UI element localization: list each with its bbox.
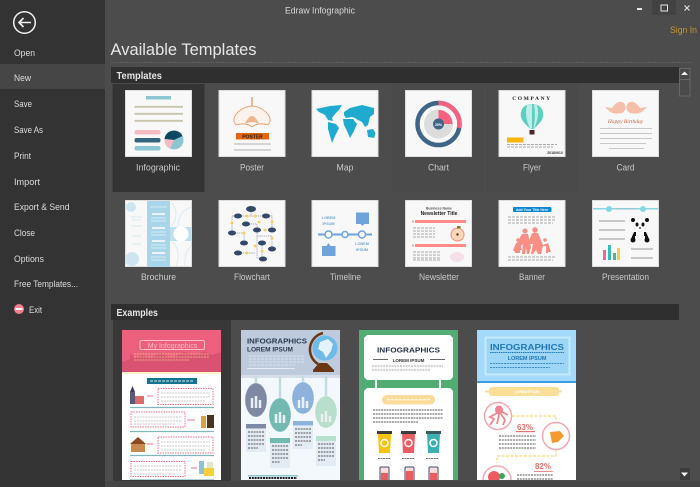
template: newsletter: Business Name <box>426 206 452 210</box>
example cards <box>122 330 576 487</box>
example: infographics lorem ipsum with globe <box>241 330 340 482</box>
menu items: New <box>14 73 31 84</box>
example: infographics blue percentages: INFOGRAPHICS <box>490 343 565 352</box>
bottom status strip <box>105 481 700 487</box>
example: my infographics: My Infographics <box>148 343 198 350</box>
template: timeline: Timeline <box>330 272 361 283</box>
icon: octopus circle <box>484 402 512 430</box>
selected template highlight <box>112 84 204 192</box>
template: poster: POSTER <box>242 134 263 140</box>
section bar: templates <box>111 67 679 83</box>
template: poster <box>219 90 285 174</box>
section bar: templates: Templates <box>116 70 162 82</box>
sign in link: Sign In <box>670 25 697 36</box>
icon: exit <box>14 304 24 314</box>
menu items: Import <box>14 177 40 188</box>
icon: tomato circle <box>482 465 512 480</box>
example: infographics lorem ipsum with globe: INFOGRAPHICS <box>247 336 307 346</box>
example: infographics blue percentages: 82% <box>535 462 551 471</box>
template: newsletter: Newsletter <box>419 272 459 283</box>
template: chart: 25% <box>435 123 443 127</box>
example: infographics green recycling: LOREM IPSUM <box>393 358 425 363</box>
template: chart <box>406 90 472 174</box>
template: flyer: COMPANY <box>512 96 552 102</box>
template: banner: Banner <box>519 272 545 283</box>
template: map: Map <box>336 162 354 174</box>
template: newsletter <box>406 200 472 283</box>
template: timeline: IPSUM <box>356 248 368 252</box>
template: timeline <box>312 200 378 283</box>
template: timeline: LOREM <box>322 216 335 220</box>
example: infographics lorem ipsum with globe: LOREM IPSUM <box>247 346 293 354</box>
example: infographics green recycling: INFOGRAPHICS <box>377 348 440 354</box>
sidebar menu <box>0 0 105 487</box>
template: card: Happy Birthday <box>607 119 644 125</box>
template: chart: Chart <box>428 162 449 174</box>
section bar: examples <box>111 304 679 320</box>
template: banner: Add Your Title Here <box>516 208 548 212</box>
example: infographics blue percentages: LOREM IPSUM <box>508 356 547 362</box>
template: card: Card <box>616 162 634 174</box>
template: flowchart: Flowchart <box>234 272 270 283</box>
selected example highlight <box>113 320 231 481</box>
template: brochure: Brochure <box>141 272 176 283</box>
example: infographics green recycling <box>359 330 458 483</box>
template: flyer: Flyer <box>523 162 541 174</box>
title bar <box>285 0 690 16</box>
template: flyer: 2018/9/10 <box>547 151 563 155</box>
icon: back arrow <box>14 12 35 33</box>
template: flowchart <box>219 200 285 283</box>
scrollbar <box>680 68 690 480</box>
template: banner <box>499 200 565 283</box>
template: timeline: LOREM <box>355 242 369 246</box>
menu items: Export & Send <box>14 202 70 213</box>
menu items: Print <box>14 151 31 162</box>
example: infographics blue percentages: LOREM IPSUM <box>515 390 539 394</box>
example: my infographics <box>122 330 221 482</box>
title bar: Edraw Infographic <box>285 6 355 16</box>
template: flyer <box>499 90 565 174</box>
menu items: Open <box>14 48 35 59</box>
menu items: Close <box>14 228 35 239</box>
menu items: Options <box>14 254 44 265</box>
icon: globe <box>310 333 338 372</box>
icon: food circle <box>542 422 570 450</box>
template: infographic <box>126 90 192 174</box>
template: timeline: IPSUM <box>322 222 335 226</box>
template: newsletter: Newsletter Title <box>421 211 458 217</box>
template: brochure <box>125 200 192 283</box>
template: presentation <box>592 200 658 283</box>
example: infographics blue percentages: 63% <box>517 423 533 432</box>
template: poster: Poster <box>240 162 264 174</box>
menu items: Exit <box>29 305 42 316</box>
template: presentation: Presentation <box>602 272 649 283</box>
example: infographics blue percentages <box>477 330 576 487</box>
section bar: examples: Examples <box>116 307 158 319</box>
menu items: Save <box>14 99 32 110</box>
page heading: Available Templates <box>110 40 256 59</box>
menu items: Free Templates... <box>14 279 78 290</box>
template: card <box>592 90 658 174</box>
menu items <box>14 48 78 316</box>
template: map <box>312 90 378 174</box>
menu items: Save As <box>14 125 43 136</box>
template: infographic: Infographic <box>136 162 180 174</box>
